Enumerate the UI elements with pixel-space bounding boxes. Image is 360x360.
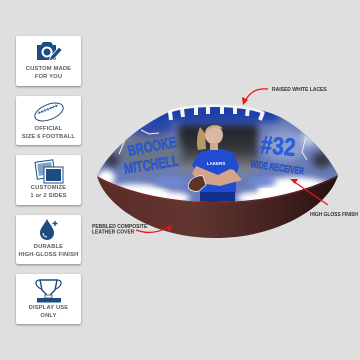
callout: raised white laces — [242, 87, 327, 105]
number and position: WIDE RECEIVER — [250, 159, 305, 178]
label — [26, 66, 71, 80]
name: Brooke Mitchell: BROOKE — [127, 134, 178, 160]
label: FOR YOU — [35, 74, 62, 80]
callout: pebbled composite leather cover — [92, 224, 172, 236]
icon: water drop — [40, 219, 58, 240]
callout: high gloss finish: HIGH GLOSS FINISH — [310, 212, 358, 218]
label: DURABLE — [34, 244, 63, 250]
callout: high gloss finish — [290, 179, 358, 218]
panel: display use only — [16, 274, 81, 324]
icon: trophy — [35, 279, 62, 302]
label: CUSTOMIZE — [31, 185, 66, 191]
player — [188, 125, 242, 202]
callout: pebbled composite leather cover: LEATHER COVER — [92, 230, 135, 236]
icon: camera and pencil — [37, 42, 62, 60]
football with callouts — [92, 87, 358, 238]
label: CUSTOM MADE — [26, 66, 71, 72]
football: stitched seam — [98, 177, 337, 203]
football: printed panel — [97, 107, 338, 202]
panel: customize sides — [16, 155, 81, 205]
label — [18, 244, 78, 258]
label: 1 or 2 SIDES — [30, 193, 67, 199]
football: white laces — [168, 105, 264, 120]
label: ONLY — [40, 313, 57, 319]
name: Brooke Mitchell — [124, 136, 180, 174]
number and position: #32 — [259, 131, 297, 162]
label: SIZE 6 FOOTBALL — [22, 134, 75, 140]
callout: raised white laces: RAISED WHITE LACES — [272, 87, 327, 93]
callout: pebbled composite leather cover: PEBBLED COMPOSITE — [92, 224, 148, 230]
panel: custom made for you — [16, 36, 81, 86]
label — [30, 185, 67, 199]
label: OFFICIAL — [35, 126, 62, 132]
name: Brooke Mitchell: MITCHELL — [123, 153, 180, 178]
panel: durable high-gloss finish — [16, 215, 81, 264]
label: HIGH-GLOSS FINISH — [19, 252, 78, 258]
label: DISPLAY USE — [29, 305, 68, 311]
icon: football — [34, 102, 64, 122]
number and position — [250, 136, 304, 175]
player: LAKERS — [207, 161, 225, 166]
football: brown leather body — [97, 175, 338, 238]
label — [22, 126, 75, 140]
icon: two photos — [34, 159, 64, 184]
label — [29, 305, 68, 319]
panel: official size 6 football — [16, 96, 81, 145]
